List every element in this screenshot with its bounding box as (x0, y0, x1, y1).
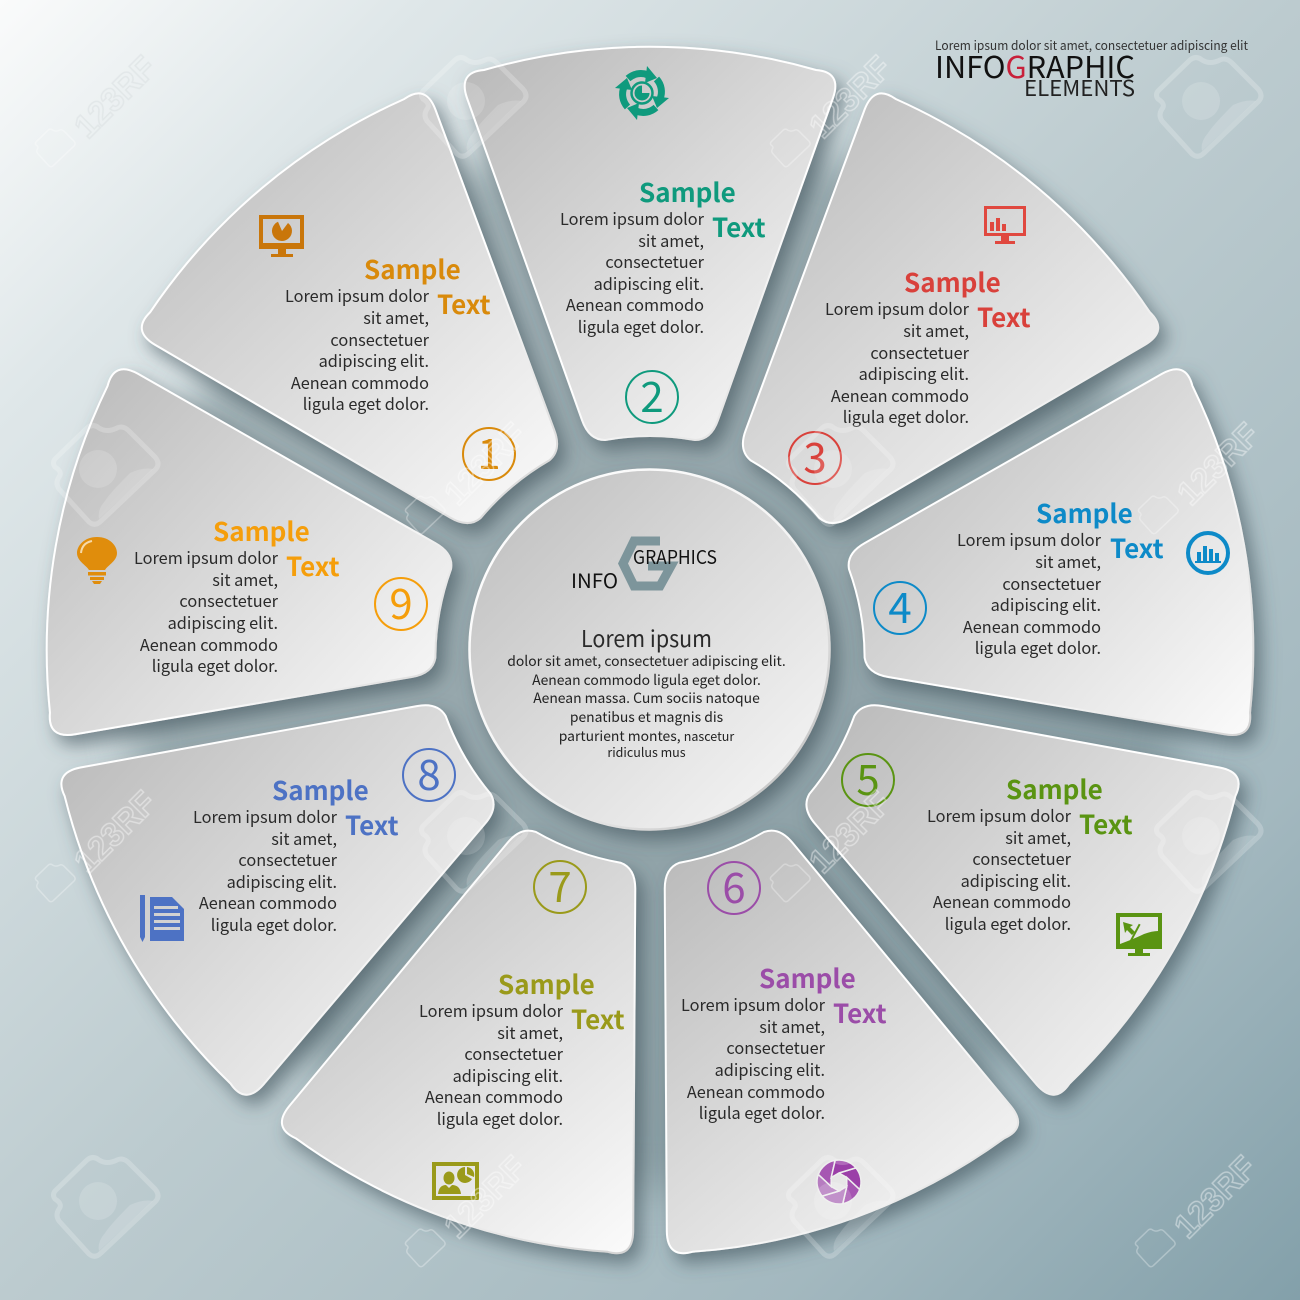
icon: circular arrows with clock (615, 66, 669, 120)
segment 9 shape (24, 363, 475, 796)
body text: adipiscing elit. (715, 1057, 825, 1081)
body text: consectetuer (179, 588, 279, 612)
central body text: parturient montes, nascetur (559, 726, 734, 746)
body text: consectetuer (464, 1041, 564, 1065)
badge number 8 (403, 742, 455, 803)
heading: Text (437, 285, 491, 322)
segment 7 shape (270, 784, 752, 1280)
body text: sit amet, (497, 1020, 563, 1044)
body text: Aenean commodo (831, 383, 969, 407)
header: infographic elements (935, 35, 1248, 103)
panel: segment 4 (825, 363, 1276, 796)
body text: sit amet, (363, 305, 429, 329)
central body text: Aenean commodo ligula eget dolor. (532, 670, 761, 690)
watermark text: 123RF (1170, 416, 1266, 512)
panel: central circle (470, 470, 830, 830)
body text: Aenean commodo (291, 370, 429, 394)
panel: segment 3 (643, 69, 1180, 608)
heading: Text (833, 994, 887, 1031)
panel: segment 6 (548, 784, 1030, 1280)
body text: Lorem ipsum dolor (825, 296, 970, 320)
body text: Aenean commodo (566, 292, 704, 316)
body text: consectetuer (972, 846, 1072, 870)
body text: ligula eget dolor. (843, 404, 969, 428)
central heading: Lorem ipsum (581, 620, 712, 654)
icon: monitor with pie chart (259, 215, 304, 257)
logo: hexagon G (623, 541, 671, 586)
body text: Lorem ipsum dolor (134, 545, 279, 569)
watermark text: 123RF (67, 49, 163, 145)
badge number 2: 2 (640, 364, 664, 425)
icon: circle with bar chart (1188, 533, 1228, 573)
panel: segment 9 (24, 363, 475, 796)
central body text: ridiculus mus (607, 742, 686, 761)
panel: segment 1 (120, 69, 657, 608)
body text: Aenean commodo (425, 1084, 563, 1108)
header title: INFOGRAPHIC (935, 43, 1135, 87)
body text: ligula eget dolor. (578, 314, 704, 338)
icon: presentation board (1116, 913, 1162, 956)
header tagline: Lorem ipsum dolor sit amet, consectetuer adipiscing elit (935, 35, 1248, 54)
body text: Lorem ipsum dolor (193, 804, 338, 828)
body text: sit amet, (638, 228, 704, 252)
heading: Text (571, 1000, 625, 1037)
body text: Lorem ipsum dolor (560, 206, 705, 230)
body text: ligula eget dolor. (945, 911, 1071, 935)
watermark small stamps (35, 129, 1178, 1267)
badge number 5 (842, 747, 894, 808)
watermark text: 123RF (802, 784, 898, 880)
watermark text: 123RF (437, 416, 533, 512)
body text: consectetuer (870, 340, 970, 364)
heading: Text (286, 547, 340, 584)
panel: segment 7 (270, 784, 752, 1280)
body text: Lorem ipsum dolor (285, 283, 430, 307)
heading: Text (1079, 805, 1133, 842)
body text: ligula eget dolor. (699, 1100, 825, 1124)
panel: segment 2 (465, 47, 835, 440)
body text: Lorem ipsum dolor (927, 803, 1072, 827)
badge number 3: 3 (803, 425, 827, 486)
badge number 9: 9 (389, 571, 413, 632)
header subtitle: ELEMENTS (1024, 71, 1135, 103)
body text: sit amet, (212, 567, 278, 591)
body text: Lorem ipsum dolor (681, 992, 826, 1016)
body text: adipiscing elit. (168, 610, 278, 634)
body text: Aenean commodo (199, 890, 337, 914)
segment 8 shape (35, 595, 561, 1112)
central body text: dolor sit amet, consectetuer adipiscing elit. (507, 651, 786, 671)
central disc (470, 470, 830, 830)
panel: segment 8 (35, 595, 561, 1112)
badge number 2 (626, 364, 678, 425)
body text: consectetuer (1002, 571, 1102, 595)
watermark text: 123RF (437, 1149, 533, 1245)
badge number 1 (463, 421, 515, 482)
body text: adipiscing elit. (594, 271, 704, 295)
badge number 4: 4 (888, 575, 912, 636)
badge number 3 (789, 425, 841, 486)
watermark text: 123RF (802, 49, 898, 145)
badge number 8: 8 (417, 742, 441, 803)
badge number 4 (874, 575, 926, 636)
segment 3 shape (643, 69, 1180, 608)
central body text: penatibus et magnis dis (570, 707, 723, 727)
heading: Sample (272, 771, 369, 808)
central body text: Aenean massa. Cum sociis natoque (533, 688, 760, 708)
segment 1 shape (120, 69, 657, 608)
body text: adipiscing elit. (319, 348, 429, 372)
heading: Text (712, 208, 766, 245)
heading: Sample (1036, 494, 1133, 531)
icon: light bulb (77, 537, 117, 584)
body text: sit amet, (1005, 825, 1071, 849)
heading: Sample (498, 965, 595, 1002)
body text: consectetuer (726, 1035, 826, 1059)
badge number 6 (708, 855, 760, 916)
logo text INFO: INFO (571, 565, 618, 594)
heading: Text (1110, 529, 1164, 566)
body text: adipiscing elit. (961, 868, 1071, 892)
icon: camera aperture (816, 1156, 862, 1208)
body text: consectetuer (330, 327, 430, 351)
logo text GRAPHICS: GRAPHICS (633, 543, 717, 570)
body text: sit amet, (1035, 549, 1101, 573)
badge number 1: 1 (477, 421, 501, 482)
body text: ligula eget dolor. (211, 912, 337, 936)
heading: Text (977, 298, 1031, 335)
heading: Sample (759, 959, 856, 996)
heading: Sample (639, 173, 736, 210)
body text: sit amet, (903, 318, 969, 342)
watermark text: 123RF (67, 784, 163, 880)
badge number 5: 5 (856, 747, 880, 808)
body text: Aenean commodo (933, 889, 1071, 913)
body text: consectetuer (238, 847, 338, 871)
icon: monitor with bar chart (984, 206, 1026, 244)
watermark text: 123RF (1167, 1149, 1263, 1245)
heading: Sample (904, 263, 1001, 300)
body text: Aenean commodo (687, 1079, 825, 1103)
body text: ligula eget dolor. (437, 1106, 563, 1130)
badge number 6: 6 (722, 855, 746, 916)
body text: Lorem ipsum dolor (419, 998, 564, 1022)
segment 5 shape (739, 595, 1265, 1112)
body text: consectetuer (605, 249, 705, 273)
badge number 7: 7 (548, 854, 572, 915)
body text: ligula eget dolor. (975, 635, 1101, 659)
body text: adipiscing elit. (859, 361, 969, 385)
segment 6 shape (548, 784, 1030, 1280)
body text: Lorem ipsum dolor (957, 527, 1102, 551)
wheel backdrop shade (125, 130, 1185, 1190)
body text: Aenean commodo (140, 632, 278, 656)
body text: sit amet, (759, 1014, 825, 1038)
heading: Text (345, 806, 399, 843)
body text: ligula eget dolor. (303, 391, 429, 415)
icon: document (140, 895, 184, 942)
icon: presenter board with pie (432, 1162, 479, 1200)
segment 4 shape (825, 363, 1276, 796)
heading: Sample (213, 512, 310, 549)
body text: adipiscing elit. (991, 592, 1101, 616)
body text: adipiscing elit. (227, 869, 337, 893)
heading: Sample (364, 250, 461, 287)
heading: Sample (1006, 770, 1103, 807)
body text: Aenean commodo (963, 614, 1101, 638)
badge number 7 (534, 854, 586, 915)
body text: ligula eget dolor. (152, 653, 278, 677)
panel: segment 5 (739, 595, 1265, 1112)
body text: sit amet, (271, 826, 337, 850)
badge number 9 (375, 571, 427, 632)
body text: adipiscing elit. (453, 1063, 563, 1087)
segment 2 shape (465, 47, 835, 440)
